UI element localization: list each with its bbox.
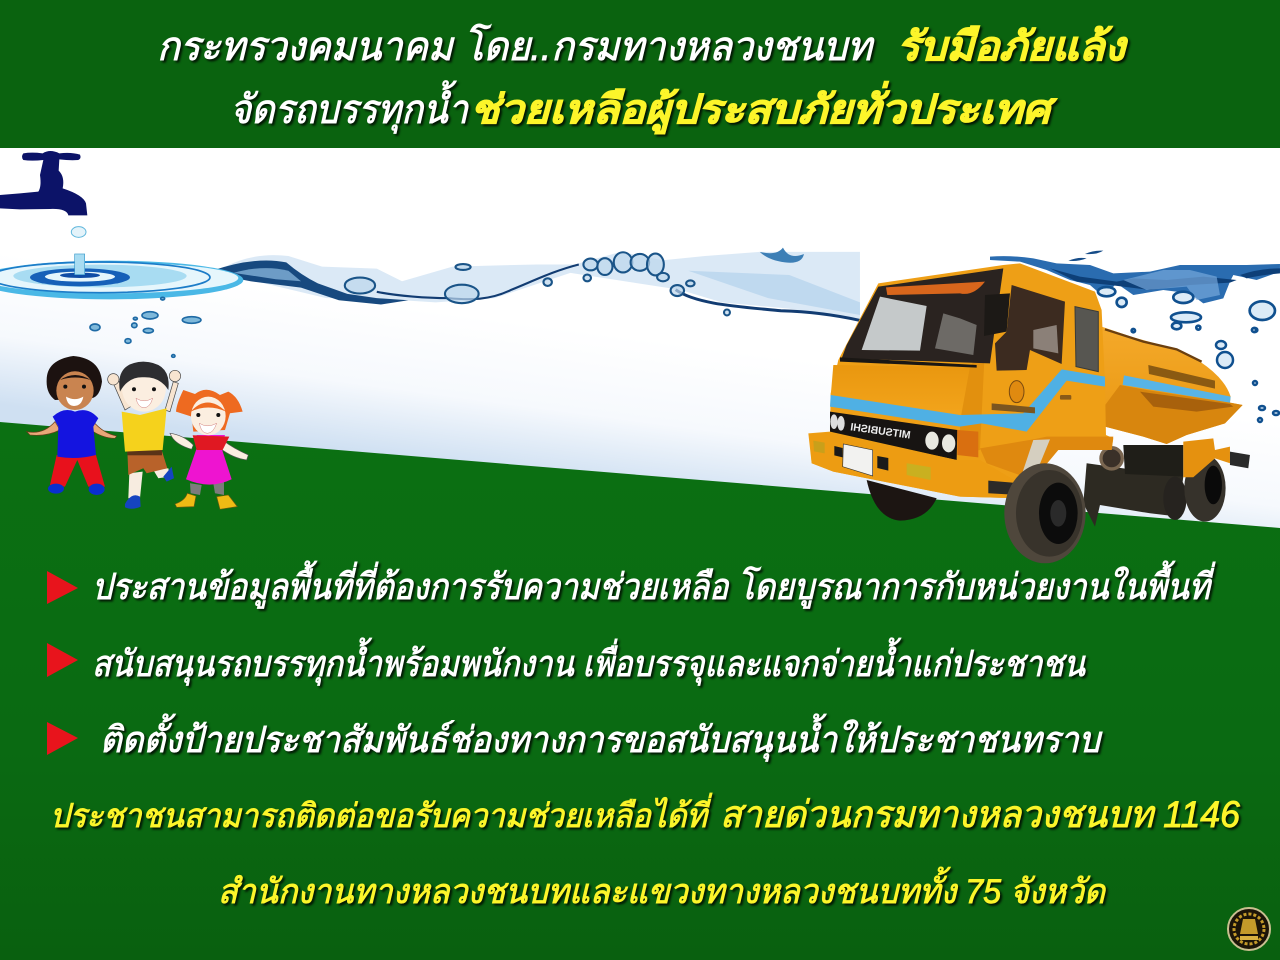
icon: ministry seal xyxy=(1228,908,1270,950)
water droplets left xyxy=(90,297,201,357)
illustration: orange water tanker truck xyxy=(808,263,1250,563)
door window xyxy=(995,285,1065,371)
pale water xyxy=(225,252,860,321)
water splash behind truck xyxy=(990,251,1280,303)
dark left wedge xyxy=(212,260,408,304)
contact line: hotline 1146: ประชาชนสามารถติดต่อขอรับความช่วยเหลือได้ที่ xyxy=(50,793,713,834)
title line 2: ช่วยเหลือผู้ประสบภัยทั่วประเทศ xyxy=(470,81,1058,135)
cab body xyxy=(808,263,1113,498)
rear window xyxy=(1075,307,1098,372)
door emblem xyxy=(1009,381,1024,403)
chassis xyxy=(1101,438,1250,477)
thin waterline xyxy=(377,264,579,299)
bullet 2: สนับสนุนรถบรรทุกน้ำพร้อมพนักงาน เพื่อบรรจุและแจกจ่ายน้ำแก่ประชาชน xyxy=(92,637,1086,686)
front wheel xyxy=(1004,463,1086,563)
title line 1: กระทรวงคมนาคม โดย..กรมทางหลวงชนบท xyxy=(157,23,874,69)
far front wheel and undercarriage shadow xyxy=(867,463,1183,527)
cab body: MITSUBISHI xyxy=(849,421,911,442)
water wave band xyxy=(212,248,860,321)
child 1: blue shirt xyxy=(27,356,117,495)
mirror xyxy=(984,293,1010,336)
windshield xyxy=(842,268,1003,363)
water droplets lower right xyxy=(1216,328,1279,422)
water droplets right xyxy=(1098,287,1275,332)
child 3: pink dress xyxy=(170,390,248,509)
title xyxy=(157,23,1129,135)
contact line: hotline 1146 xyxy=(50,793,1240,835)
blue stripe xyxy=(830,369,1105,432)
bubbles xyxy=(345,252,730,315)
illustration: three children xyxy=(27,356,248,509)
grille xyxy=(830,412,957,460)
title line 2 xyxy=(230,80,1058,135)
title line 2: จัดรถบรรทุกน้ำ xyxy=(230,80,469,134)
bumper xyxy=(809,433,1020,498)
child 2: yellow shirt xyxy=(108,362,181,509)
contact line: provincial offices: สำนักงานทางหลวงชนบทและแขวงทางหลวงชนบททั้ง 75 จังหวัด xyxy=(218,866,1107,911)
icon: water tap, drip and ripple xyxy=(0,151,243,299)
rear wheel xyxy=(1163,455,1226,522)
bullet 3: ติดตั้งป้ายประชาสัมพันธ์ช่องทางการขอสนับสนุนน้ำให้ประชาชนทราบ xyxy=(100,713,1103,762)
green ground with slope xyxy=(0,422,1280,960)
bullet list xyxy=(47,560,1215,762)
contact line: hotline 1146: สายด่วนกรมทางหลวงชนบท 1146 xyxy=(720,794,1240,835)
page background: sky area xyxy=(0,148,1280,548)
title line 1: รับมือภัยแล้ง xyxy=(897,25,1129,69)
top green banner xyxy=(0,0,1280,148)
tank xyxy=(1102,327,1243,444)
